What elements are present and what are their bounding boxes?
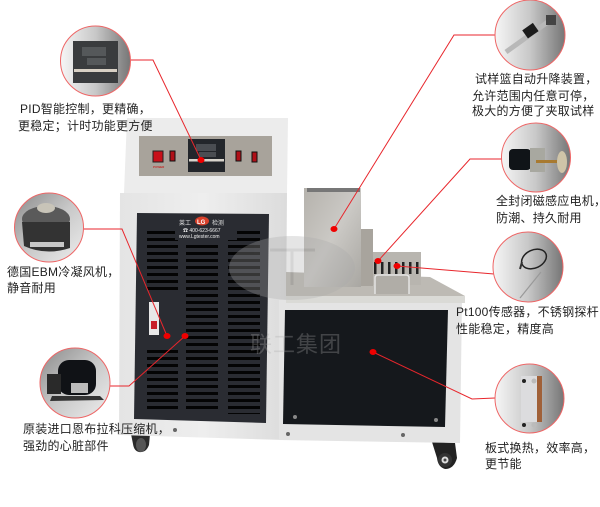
text: sensor: Pt100传感器，不锈钢探杆: [456, 304, 599, 319]
text: sensor: 性能稳定，精度高: [456, 321, 554, 336]
door latch: [149, 302, 159, 335]
icon: Pt100 sensor: [493, 232, 563, 302]
text: heat exchanger: 更节能: [485, 457, 522, 471]
icon: compressor: [40, 348, 110, 418]
brand plate: LG: [197, 220, 206, 226]
brand plate: ☎ 400-623-6667: [183, 228, 221, 234]
text: motor: [496, 193, 600, 225]
text: basket lift: 允许范围内任意可停，: [472, 88, 595, 103]
icon: plate heat exchanger: [495, 364, 564, 433]
icon: motor: [502, 123, 570, 192]
stainless table top: [286, 272, 465, 303]
text: heat exchanger: [485, 440, 595, 471]
text: basket lift: 极大的方便了夹取试样: [472, 103, 595, 118]
cabinet lower tall section: [119, 193, 287, 440]
text: sensor: [456, 304, 599, 336]
frame screws: [173, 428, 405, 437]
text: basket lift: 试样篮自动升降装置，: [475, 71, 598, 86]
text: fan: 德国EBM冷凝风机，: [7, 264, 120, 279]
temperature controller: [188, 139, 225, 172]
alarm switch: [252, 152, 257, 162]
cabinet top section: [124, 118, 288, 193]
leader line: PID: [130, 60, 201, 160]
brand plate: www.Lgtester.com: [179, 234, 220, 240]
text: fan: 静音耐用: [7, 280, 56, 295]
lower right black door: [283, 310, 448, 427]
caster: left: [131, 434, 150, 452]
text: basket lift: [472, 71, 598, 118]
leader line: heat exchanger: [373, 352, 495, 399]
cabinet base section: [279, 300, 462, 443]
text: fan: [7, 264, 120, 295]
leader line: sensor: [397, 266, 494, 274]
brand plate: 莱工: [179, 219, 191, 227]
watermark logo: [229, 236, 355, 357]
icon: lift rail: [495, 0, 565, 70]
brand plate: 检测: [212, 219, 224, 227]
text: PID: [18, 101, 153, 133]
leader line: basket lift: [334, 35, 496, 229]
text: PID: PID智能控制，更精确，: [20, 101, 151, 116]
cooling switch: [236, 151, 241, 161]
brand plate: [175, 216, 237, 240]
louvered front panel: [134, 213, 269, 423]
control panel: [139, 136, 272, 176]
icon: PID controller: [60, 26, 130, 96]
text: PID: 更稳定；计时功能更方便: [18, 118, 153, 133]
text: heat exchanger: 板式换热，效率高，: [485, 440, 595, 455]
icon: condenser fan: [14, 193, 84, 262]
text: compressor: 原装进口恩布拉科压缩机，: [23, 421, 170, 436]
leader line: compressor: [109, 336, 185, 386]
leader line: fan: [83, 229, 167, 336]
leader dots: [164, 157, 400, 355]
bath tank with slots: [373, 252, 421, 294]
text: compressor: [23, 421, 170, 453]
leader line: motor: [378, 159, 502, 261]
text: motor: 防潮、持久耐用: [496, 210, 582, 225]
power switch: POWER: [153, 165, 165, 169]
vent slots: [147, 229, 260, 414]
sample basket lift housing: [304, 188, 373, 287]
machine: low temperature test cabinet: [119, 118, 465, 469]
stop switch: [170, 151, 175, 161]
watermark logo: 联工集团: [250, 332, 342, 357]
caster: right: [432, 442, 457, 469]
text: compressor: 强劲的心脏部件: [23, 438, 109, 453]
